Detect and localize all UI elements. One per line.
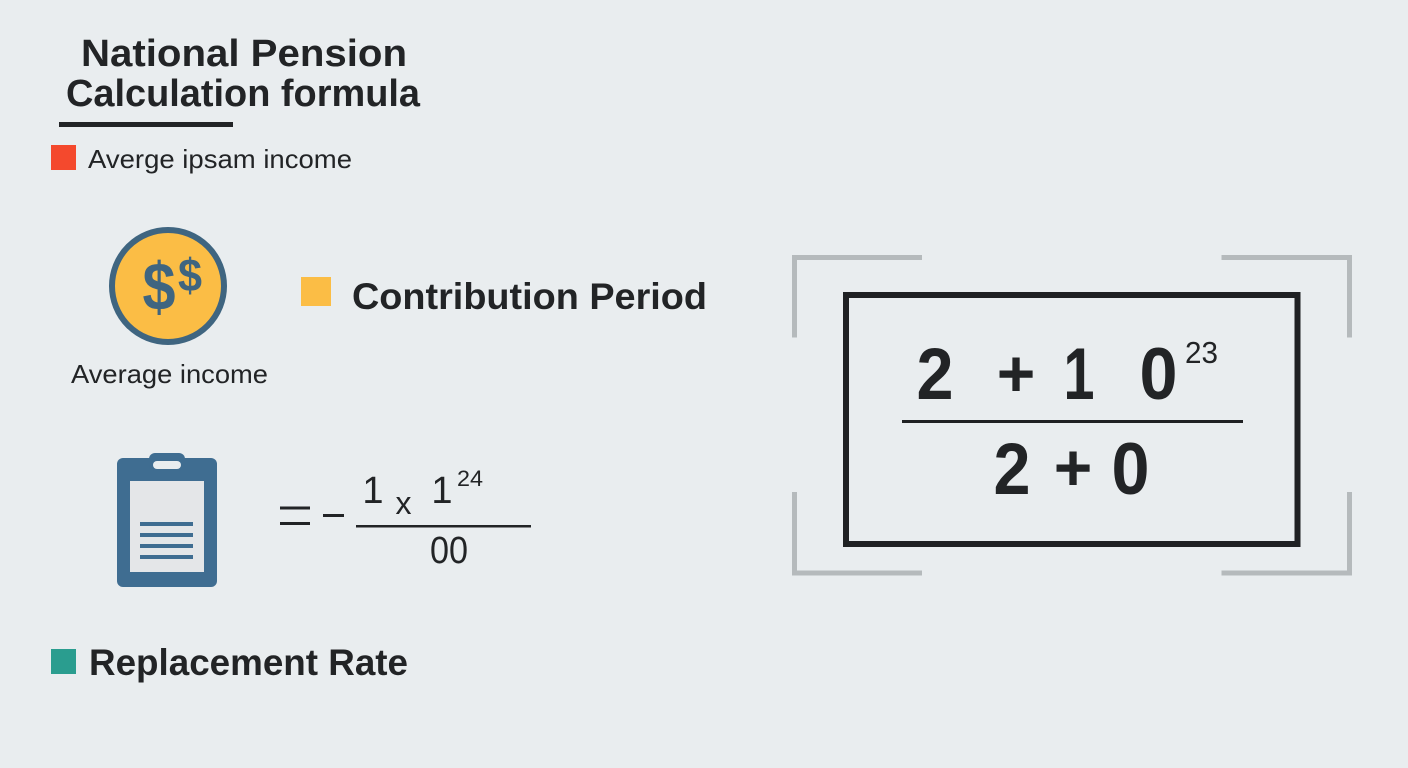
title underline: [59, 122, 233, 127]
title: Calculation formula: [66, 73, 421, 115]
formula numerator: +: [997, 336, 1035, 410]
small formula: 1: [362, 470, 384, 512]
legend: average ipsam income: Averge ipsam income: [88, 144, 352, 174]
formula numerator: 2: [916, 334, 954, 415]
legend: replacement rate: Replacement Rate: [89, 642, 408, 683]
small formula: 00: [430, 530, 468, 572]
title: National Pension: [81, 33, 407, 75]
formula numerator: 1: [1064, 334, 1094, 415]
formula numerator: 23: [1185, 335, 1218, 370]
formula numerator: 0: [1140, 334, 1178, 415]
label: average income: Average income: [71, 359, 268, 389]
small formula: x: [396, 485, 412, 521]
formula denominator: +: [1054, 430, 1092, 504]
small formula: 1: [431, 470, 453, 512]
icon: clipboard: [117, 453, 217, 587]
icon: dollar coin: $: [142, 249, 176, 325]
formula numerator: [916, 334, 1218, 415]
icon: dollar coin: [112, 230, 224, 342]
formula denominator: 0: [1112, 429, 1150, 510]
title: [66, 33, 421, 115]
small formula: 24: [457, 466, 483, 491]
corner brackets: [794, 258, 1350, 573]
small formula: [280, 466, 531, 572]
legend: contribution period: Contribution Period: [352, 276, 707, 317]
formula denominator: [994, 429, 1150, 510]
formula box: [846, 295, 1298, 544]
icon: dollar coin: $: [178, 249, 202, 301]
formula denominator: 2: [994, 429, 1030, 510]
